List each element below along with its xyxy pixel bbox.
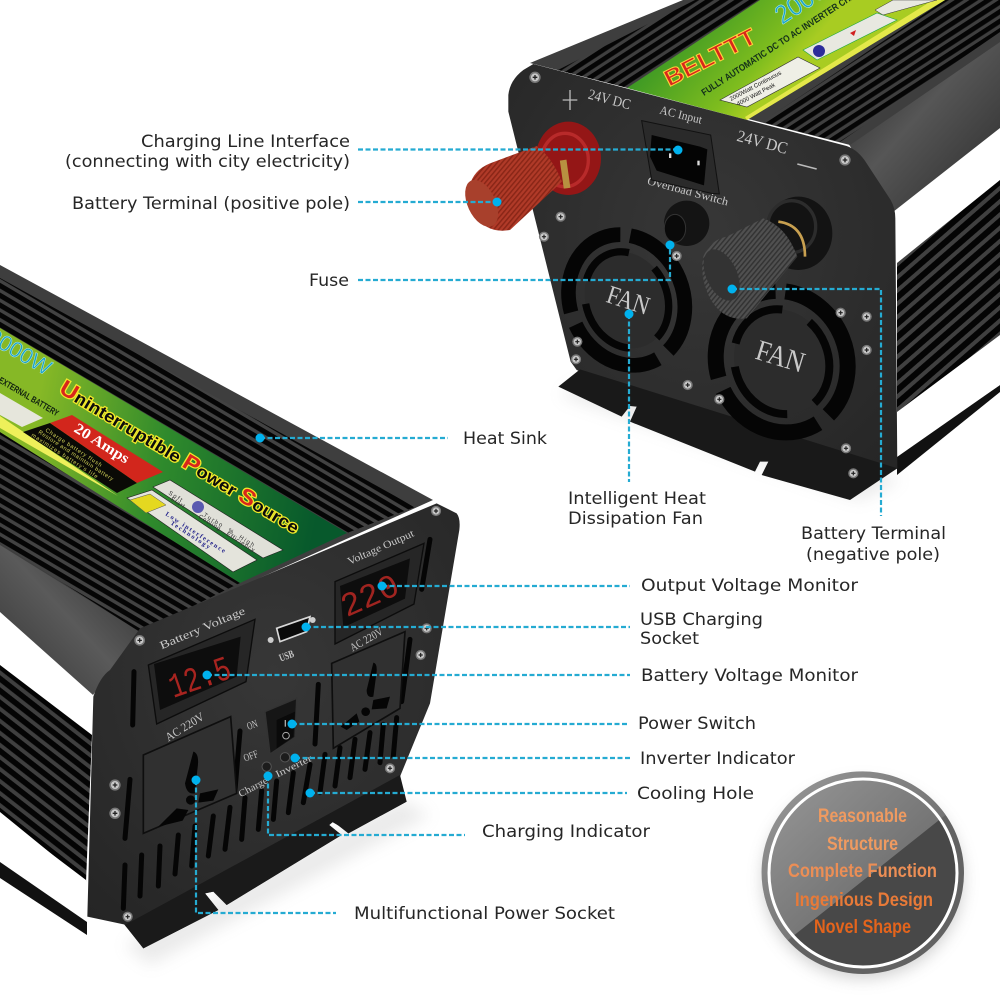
callout: charging line interface [65, 132, 682, 172]
callout label: Fuse [309, 271, 349, 291]
knob body [469, 146, 562, 231]
dot [302, 622, 310, 632]
overload switch [664, 201, 709, 246]
lower unit rounded side [0, 543, 140, 695]
leader line [306, 626, 630, 628]
callout label: Battery Voltage Monitor [641, 666, 858, 686]
terminal ring [768, 201, 816, 253]
power switch [265, 698, 297, 754]
callout label line 1: Battery Terminal [801, 524, 946, 544]
upper unit front plate details [458, 64, 897, 500]
callout label: Multifunctional Power Socket [354, 904, 615, 924]
leader line [382, 585, 630, 587]
dot [290, 754, 300, 762]
badge light half [762, 771, 946, 940]
terminal base ring [542, 133, 588, 187]
mounting bracket [123, 777, 407, 948]
callout label: Inverter Indicator [640, 749, 795, 769]
charge label: Charge [237, 775, 271, 800]
callout label: Output Voltage Monitor [641, 576, 858, 596]
leader line [207, 674, 630, 676]
voltage output label: Voltage Output [346, 529, 416, 568]
lower white sticker [127, 490, 257, 572]
amps text: 20 Amps [71, 421, 132, 467]
callout label line 1: USB Charging [640, 610, 763, 630]
dot [288, 720, 296, 728]
front plate [508, 64, 897, 490]
left AC label: AC 220V [163, 709, 207, 744]
dot [202, 670, 212, 680]
callout label: Charging Indicator [482, 822, 650, 842]
leader line [268, 776, 465, 835]
feature sticker icon [813, 45, 825, 57]
negative voltage label: 24V DC [735, 126, 790, 158]
dot [306, 788, 314, 798]
callout: inverter indicator [290, 749, 795, 769]
dot [674, 146, 682, 154]
callout label: Heat Sink [463, 429, 547, 449]
minus sign [797, 164, 817, 169]
lower inverter unit [0, 265, 460, 965]
callout: fuse [309, 240, 674, 291]
feature badge [762, 771, 964, 978]
callout label: Power Switch [638, 714, 756, 734]
upper unit ground shadow [560, 360, 900, 500]
badge white ring [769, 779, 957, 967]
leader line [310, 792, 627, 794]
socket pin [697, 161, 700, 165]
brand name: BELTTT [659, 23, 760, 91]
lower unit top surface [0, 265, 433, 632]
knob end cap [696, 244, 747, 306]
callout: multifunctional power socket [192, 776, 615, 924]
technology text: Technology [169, 520, 212, 551]
upper inverter unit [458, 0, 1000, 500]
yellow label stripe [0, 416, 118, 496]
callout: negative battery terminal [728, 284, 946, 565]
dot [624, 310, 634, 318]
fan left label: FAN [603, 280, 654, 321]
charge text: Charge battery flush [44, 428, 103, 469]
callout label: Cooling Hole [637, 784, 754, 804]
terminal base [764, 197, 832, 270]
overload switch label: Overload Switch [646, 175, 730, 209]
interference text: Low interference [164, 511, 227, 555]
turbo fan icon [192, 501, 204, 513]
red positive terminal [458, 122, 601, 232]
callout label line 2: Socket [640, 629, 699, 649]
callout: battery voltage monitor [202, 666, 858, 686]
upper unit top fins left [558, 0, 764, 88]
badge inner dark [770, 780, 956, 966]
upper unit lower side band [897, 385, 1000, 475]
callout: USB charging socket [302, 610, 763, 649]
dot [378, 582, 386, 590]
lower unit side fins [0, 665, 92, 882]
callout label line 2: Dissipation Fan [568, 509, 703, 529]
badge text: ingenious design: Ingenious Design [795, 890, 933, 911]
upper white sticker [153, 480, 283, 558]
battery voltage display [148, 619, 255, 724]
life text: maximizes battery's life [30, 433, 99, 480]
leader line [358, 245, 670, 280]
battery reading: 12.5 [164, 651, 237, 708]
callout: output voltage monitor [378, 576, 858, 596]
upper unit side fins [897, 180, 1000, 412]
right socket [332, 632, 405, 748]
lower unit top fins lower [0, 432, 240, 632]
badge text: structure: Structure [827, 834, 898, 855]
leader line [358, 201, 497, 203]
callout: heat dissipation fan [568, 310, 706, 529]
switch on mark [283, 720, 287, 727]
feature text second line: Start Cooling Efficiency [169, 497, 255, 554]
knob end cap [458, 175, 505, 232]
left socket hole [186, 795, 195, 805]
lower unit ground shadow [125, 800, 430, 965]
plate screws [109, 506, 441, 922]
small white sticker [0, 393, 43, 427]
bracket lower strip [125, 775, 407, 948]
dot [256, 434, 264, 442]
battery voltage label: Battery Voltage [158, 605, 247, 652]
leader line [732, 289, 881, 516]
lower unit green label [0, 323, 347, 583]
AC input socket [642, 121, 719, 194]
on label: ON [246, 719, 260, 733]
switch off mark [283, 732, 289, 739]
callout label line 1: Intelligent Heat [568, 489, 706, 509]
dot [264, 772, 272, 780]
socket pin [669, 153, 671, 158]
USB label: USB [278, 649, 296, 664]
dot [728, 284, 736, 294]
leader line [295, 757, 630, 759]
charge LED [262, 762, 271, 771]
yellow label stripe [745, 0, 945, 120]
mounting bracket [558, 369, 897, 500]
switch rocker [277, 712, 295, 748]
badge shadow [763, 782, 963, 978]
sticker text second line: 4000 Watt Peak [736, 82, 777, 108]
terminal base [536, 122, 601, 195]
brass shaft [560, 160, 570, 189]
black strip [23, 423, 137, 493]
upper unit green label [627, 0, 945, 120]
chip icon [130, 494, 166, 513]
badge text: complete function: Complete Function [788, 861, 937, 882]
callout label line 1: Charging Line Interface [141, 132, 350, 152]
dot [492, 198, 502, 206]
leader line [628, 314, 630, 482]
knob body [702, 218, 797, 319]
fan right [695, 271, 869, 452]
callout: charging indicator [264, 772, 650, 842]
display screen [154, 637, 241, 710]
callout: power switch [288, 714, 756, 734]
leader line [292, 723, 628, 725]
inverter label: Inverter [274, 753, 315, 780]
lower unit front plate details [87, 503, 460, 948]
leader line [260, 437, 448, 439]
left socket holes [158, 752, 218, 827]
red band [50, 415, 163, 483]
feature sticker arrow [850, 30, 856, 36]
white side section [0, 815, 87, 921]
badge base [762, 772, 964, 974]
plus sign [563, 90, 577, 110]
white body section [897, 340, 1000, 457]
fan left [549, 217, 704, 383]
lower unit bottom edge [0, 862, 87, 935]
feature text: Soft Turbo % High [167, 491, 255, 549]
leader line [196, 780, 336, 913]
grey negative terminal [696, 197, 832, 319]
upper unit rounded side [848, 40, 1000, 212]
wattage sticker [720, 57, 820, 107]
USB port [268, 617, 316, 643]
callout label line 2: (connecting with city electricity) [65, 152, 350, 172]
restore text: Restore and maintain battery [37, 430, 114, 483]
leader line [358, 148, 678, 151]
ventilation slits [123, 539, 430, 908]
sticker text: 2000Watt Continuous [729, 70, 783, 103]
top sticker [875, 0, 937, 15]
switch button [664, 214, 686, 242]
fan right label: FAN [752, 334, 808, 379]
USB port screw [268, 637, 274, 643]
upper unit top fins right [762, 0, 1000, 142]
right socket hole [361, 707, 370, 716]
USB port screw [310, 617, 316, 623]
positive voltage label: 24V DC [586, 87, 632, 113]
output voltage display [335, 543, 424, 644]
dot [192, 776, 200, 784]
lower unit top fins upper [0, 278, 415, 533]
off label: OFF [242, 749, 260, 764]
callout label: Battery Terminal (positive pole) [72, 194, 350, 214]
right AC label: AC 220V [348, 626, 386, 654]
feature sticker [803, 13, 897, 60]
inverter LED [280, 753, 290, 762]
dot [666, 240, 674, 250]
AC input label: AC Input [658, 103, 704, 127]
front plate [87, 503, 460, 925]
display screen [340, 558, 410, 627]
callout: positive battery terminal [72, 194, 502, 214]
callout: heat sink [256, 429, 547, 449]
callout label line 2: (negative pole) [806, 545, 940, 565]
socket opening [650, 135, 707, 185]
product title: Uninterruptible Power Source [55, 375, 305, 538]
right socket holes [341, 663, 390, 730]
brass arc [778, 222, 805, 257]
output reading: 220 [336, 568, 406, 627]
plate screws [529, 72, 872, 478]
left socket [143, 717, 237, 833]
callout: cooling hole [306, 784, 754, 804]
upper unit top surface [530, 0, 1000, 145]
badge text: reasonable: Reasonable [818, 806, 907, 827]
badge text: novel shape: Novel Shape [814, 917, 911, 938]
